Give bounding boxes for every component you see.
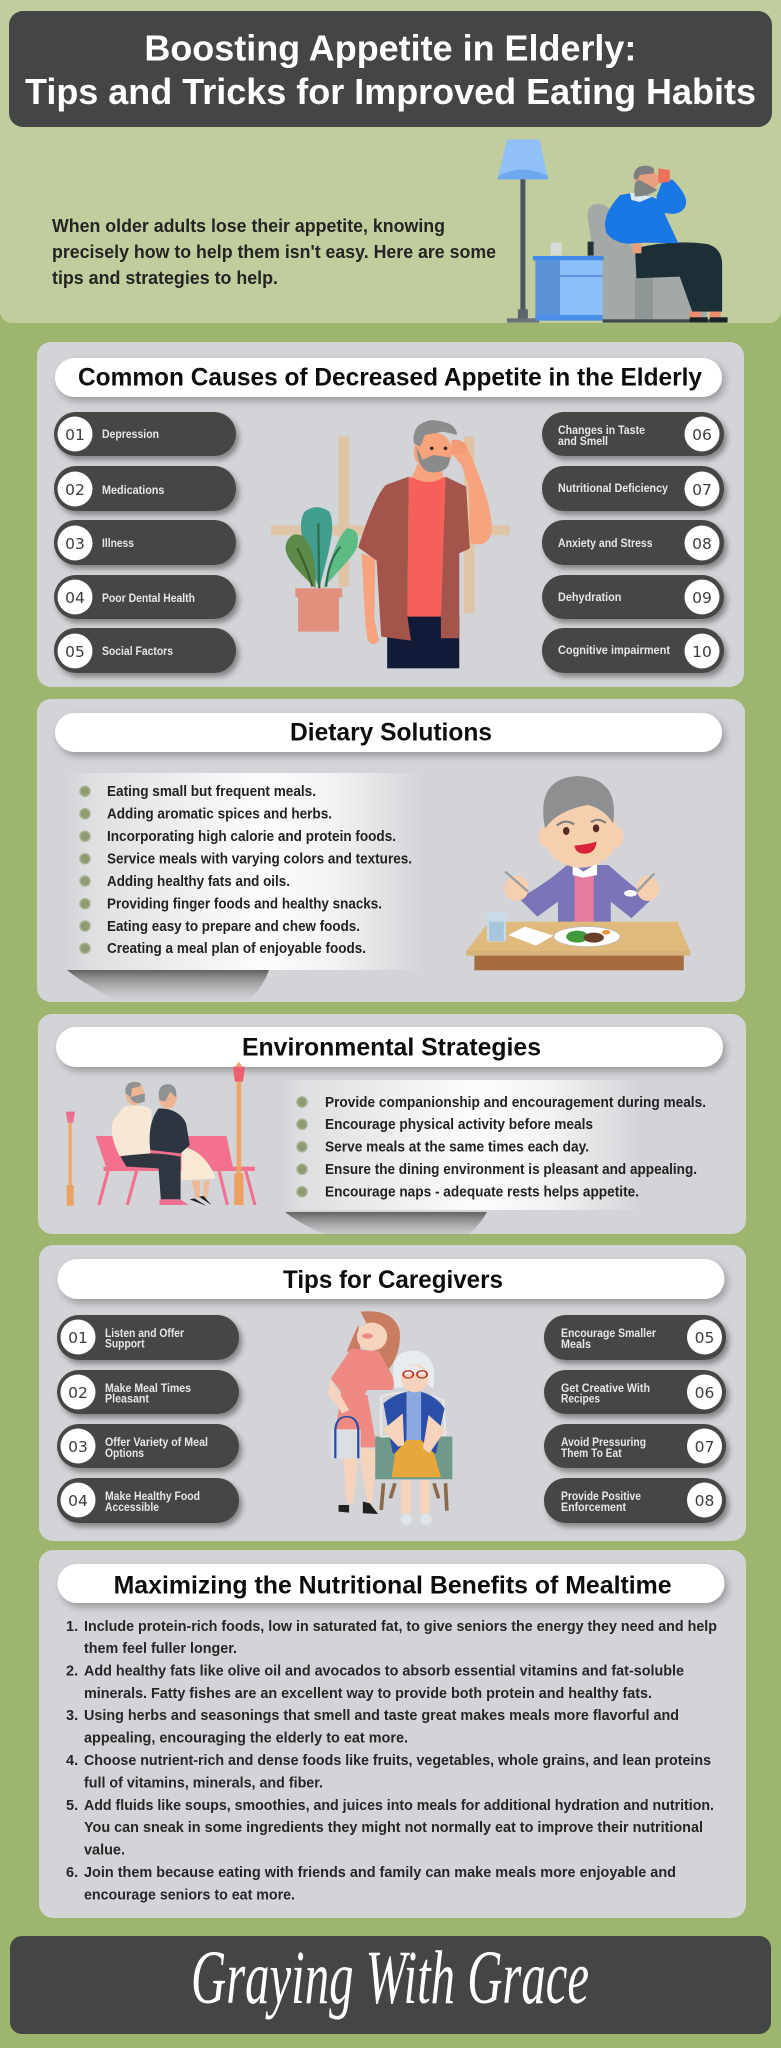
environmental list card: Serve meals at the same times each day. bbox=[325, 1140, 589, 1156]
tips list right: Recipes bbox=[561, 1394, 600, 1406]
footer banner bbox=[10, 1936, 771, 2034]
heading: environmental strategies: Environmental Strategies bbox=[242, 1034, 541, 1062]
heading: dietary solutions bbox=[55, 713, 722, 752]
cause list left: Poor Dental Health bbox=[102, 593, 195, 605]
intro band bbox=[0, 0, 781, 323]
cause list left: 02 bbox=[65, 481, 85, 499]
panel: common causes bbox=[37, 342, 744, 687]
heading: nutritional benefits: Maximizing the Nutritional Benefits of Mealtime bbox=[114, 1572, 672, 1600]
numbered tips list: value. bbox=[84, 1842, 125, 1858]
numbered tips list: 4. bbox=[66, 1753, 78, 1769]
cause list left: 04 bbox=[65, 589, 85, 607]
cause list right: 08 bbox=[692, 535, 712, 553]
numbered tips list: 5. bbox=[66, 1798, 78, 1814]
intro paragraph bbox=[52, 216, 496, 288]
cause list left: Social Factors bbox=[102, 646, 173, 658]
tips list left: Accessible bbox=[105, 1502, 159, 1514]
cause list left bbox=[54, 412, 236, 673]
environmental list card: Encourage naps - adequate rests helps appetite. bbox=[325, 1184, 639, 1200]
heading: common causes bbox=[55, 358, 722, 397]
dietary list card: Adding aromatic spices and herbs. bbox=[107, 806, 332, 822]
cause list right: Nutritional Deficiency bbox=[558, 483, 669, 495]
illustration: couple on bench bbox=[66, 1062, 255, 1206]
tips list right: Them To Eat bbox=[561, 1448, 622, 1460]
tips list left: 04 bbox=[68, 1492, 88, 1510]
cause list left: Illness bbox=[102, 538, 134, 550]
tips list left: Options bbox=[105, 1448, 144, 1460]
tips list right: Encourage Smaller bbox=[561, 1328, 656, 1340]
numbered tips list: Using herbs and seasonings that smell and taste great makes meals more flavorful and bbox=[84, 1708, 679, 1724]
dietary list card: Providing finger foods and healthy snacks. bbox=[107, 896, 382, 912]
illustration: man with plant and window bbox=[271, 420, 510, 668]
numbered tips list: full of vitamins, minerals, and fiber. bbox=[84, 1776, 323, 1792]
environmental list card: Ensure the dining environment is pleasant and appealing. bbox=[325, 1162, 697, 1178]
numbered tips list: 1. bbox=[66, 1619, 78, 1635]
tips list left: Offer Variety of Meal bbox=[105, 1437, 208, 1449]
tips list right: 06 bbox=[695, 1384, 714, 1402]
numbered tips list bbox=[66, 1619, 717, 1904]
environmental list card bbox=[280, 1080, 706, 1240]
tips list left: Make Healthy Food bbox=[105, 1491, 200, 1503]
intro paragraph: tips and strategies to help. bbox=[52, 268, 278, 288]
numbered tips list: 3. bbox=[66, 1708, 78, 1724]
title banner bbox=[9, 11, 772, 127]
numbered tips list: 6. bbox=[66, 1865, 78, 1881]
numbered tips list: appealing, encouraging the elderly to eat more. bbox=[84, 1730, 408, 1746]
numbered tips list: Include protein-rich foods, low in saturated fat, to give seniors the energy they need and help bbox=[84, 1619, 717, 1635]
cause list right: Anxiety and Stress bbox=[558, 538, 653, 550]
cause list right: Changes in Taste bbox=[558, 425, 645, 437]
illustration: elder eating at table bbox=[466, 776, 690, 970]
tips list left: 02 bbox=[68, 1384, 88, 1402]
tips list left: 01 bbox=[68, 1329, 88, 1347]
numbered tips list: You can sneak in some ingredients they might not normally eat to improve their nutritional bbox=[84, 1820, 703, 1836]
heading: tips for caregivers bbox=[58, 1259, 724, 1299]
cause list right: 06 bbox=[692, 426, 712, 444]
dietary list card: Creating a meal plan of enjoyable foods. bbox=[107, 941, 366, 957]
cause list right: 09 bbox=[692, 589, 712, 607]
numbered tips list: Choose nutrient-rich and dense foods like fruits, vegetables, whole grains, and lean proteins bbox=[84, 1753, 711, 1769]
dietary list card bbox=[67, 773, 425, 1002]
tips list left: Support bbox=[105, 1338, 145, 1350]
heading: tips for caregivers: Tips for Caregivers bbox=[283, 1266, 503, 1294]
numbered tips list: them feel fuller longer. bbox=[84, 1641, 237, 1657]
cause list right: Dehydration bbox=[558, 592, 621, 604]
illustration: man in armchair with lamp bbox=[498, 139, 728, 323]
tips list right bbox=[544, 1315, 726, 1523]
dietary list card: Eating easy to prepare and chew foods. bbox=[107, 919, 360, 935]
numbered tips list: Join them because eating with friends and family can make meals more enjoyable and bbox=[84, 1865, 676, 1881]
dietary list card: Incorporating high calorie and protein foods. bbox=[107, 829, 396, 845]
tips list right: 07 bbox=[695, 1438, 714, 1456]
heading: environmental strategies bbox=[56, 1027, 723, 1067]
environmental list card: Encourage physical activity before meals bbox=[325, 1117, 593, 1133]
dietary list card: Adding healthy fats and oils. bbox=[107, 874, 290, 890]
cause list right: 10 bbox=[692, 643, 712, 661]
tips list right: Get Creative With bbox=[561, 1383, 650, 1395]
cause list left: Depression bbox=[102, 429, 159, 441]
numbered tips list: Add fluids like soups, smoothies, and juices into meals for additional hydration and nutrition. bbox=[84, 1798, 714, 1814]
numbered tips list: encourage seniors to eat more. bbox=[84, 1888, 295, 1904]
numbered tips list: minerals. Fatty fishes are an excellent way to provide both protein and healthy fats. bbox=[84, 1686, 652, 1702]
panel: tips for caregivers bbox=[39, 1245, 746, 1541]
tips list right: 05 bbox=[695, 1329, 714, 1347]
heading: dietary solutions: Dietary Solutions bbox=[290, 719, 492, 747]
panel: environmental strategies bbox=[38, 1014, 746, 1240]
cause list right: and Smell bbox=[558, 436, 608, 448]
cause list left: Medications bbox=[102, 485, 164, 497]
tips list right: Provide Positive bbox=[561, 1491, 641, 1503]
panel: dietary solutions bbox=[37, 699, 745, 1002]
tips list left: Make Meal Times bbox=[105, 1383, 191, 1395]
heading: nutritional benefits bbox=[58, 1564, 724, 1603]
title banner: Boosting Appetite in Elderly: bbox=[144, 28, 636, 68]
cause list right: 07 bbox=[692, 481, 712, 499]
tips list right: Enforcement bbox=[561, 1502, 626, 1514]
panel: nutritional benefits bbox=[39, 1550, 746, 1918]
dietary list card: Service meals with varying colors and textures. bbox=[107, 852, 412, 868]
tips list left: Pleasant bbox=[105, 1394, 149, 1406]
tips list left bbox=[57, 1315, 239, 1523]
tips list left: Listen and Offer bbox=[105, 1328, 184, 1340]
cause list left: 05 bbox=[65, 643, 85, 661]
intro paragraph: precisely how to help them isn't easy. Here are some bbox=[52, 242, 496, 262]
cause list left: 03 bbox=[65, 535, 85, 553]
cause list right: Cognitive impairment bbox=[558, 645, 670, 657]
cause list left: 01 bbox=[65, 426, 85, 444]
illustration: caregiver and seated elder bbox=[328, 1311, 452, 1525]
environmental list card: Provide companionship and encouragement during meals. bbox=[325, 1095, 706, 1111]
cause list right bbox=[542, 412, 724, 673]
tips list right: 08 bbox=[695, 1492, 714, 1510]
heading: common causes: Common Causes of Decreased Appetite in the Elderly bbox=[78, 364, 702, 392]
tips list right: Meals bbox=[561, 1339, 591, 1351]
dietary list card: Eating small but frequent meals. bbox=[107, 784, 316, 800]
numbered tips list: Add healthy fats like olive oil and avocados to absorb essential vitamins and fat-soluble bbox=[84, 1664, 684, 1680]
tips list right: Avoid Pressuring bbox=[561, 1437, 646, 1449]
tips list left: 03 bbox=[68, 1438, 88, 1456]
title banner: Tips and Tricks for Improved Eating Habits bbox=[25, 71, 756, 112]
intro paragraph: When older adults lose their appetite, knowing bbox=[52, 216, 445, 236]
numbered tips list: 2. bbox=[66, 1664, 78, 1680]
